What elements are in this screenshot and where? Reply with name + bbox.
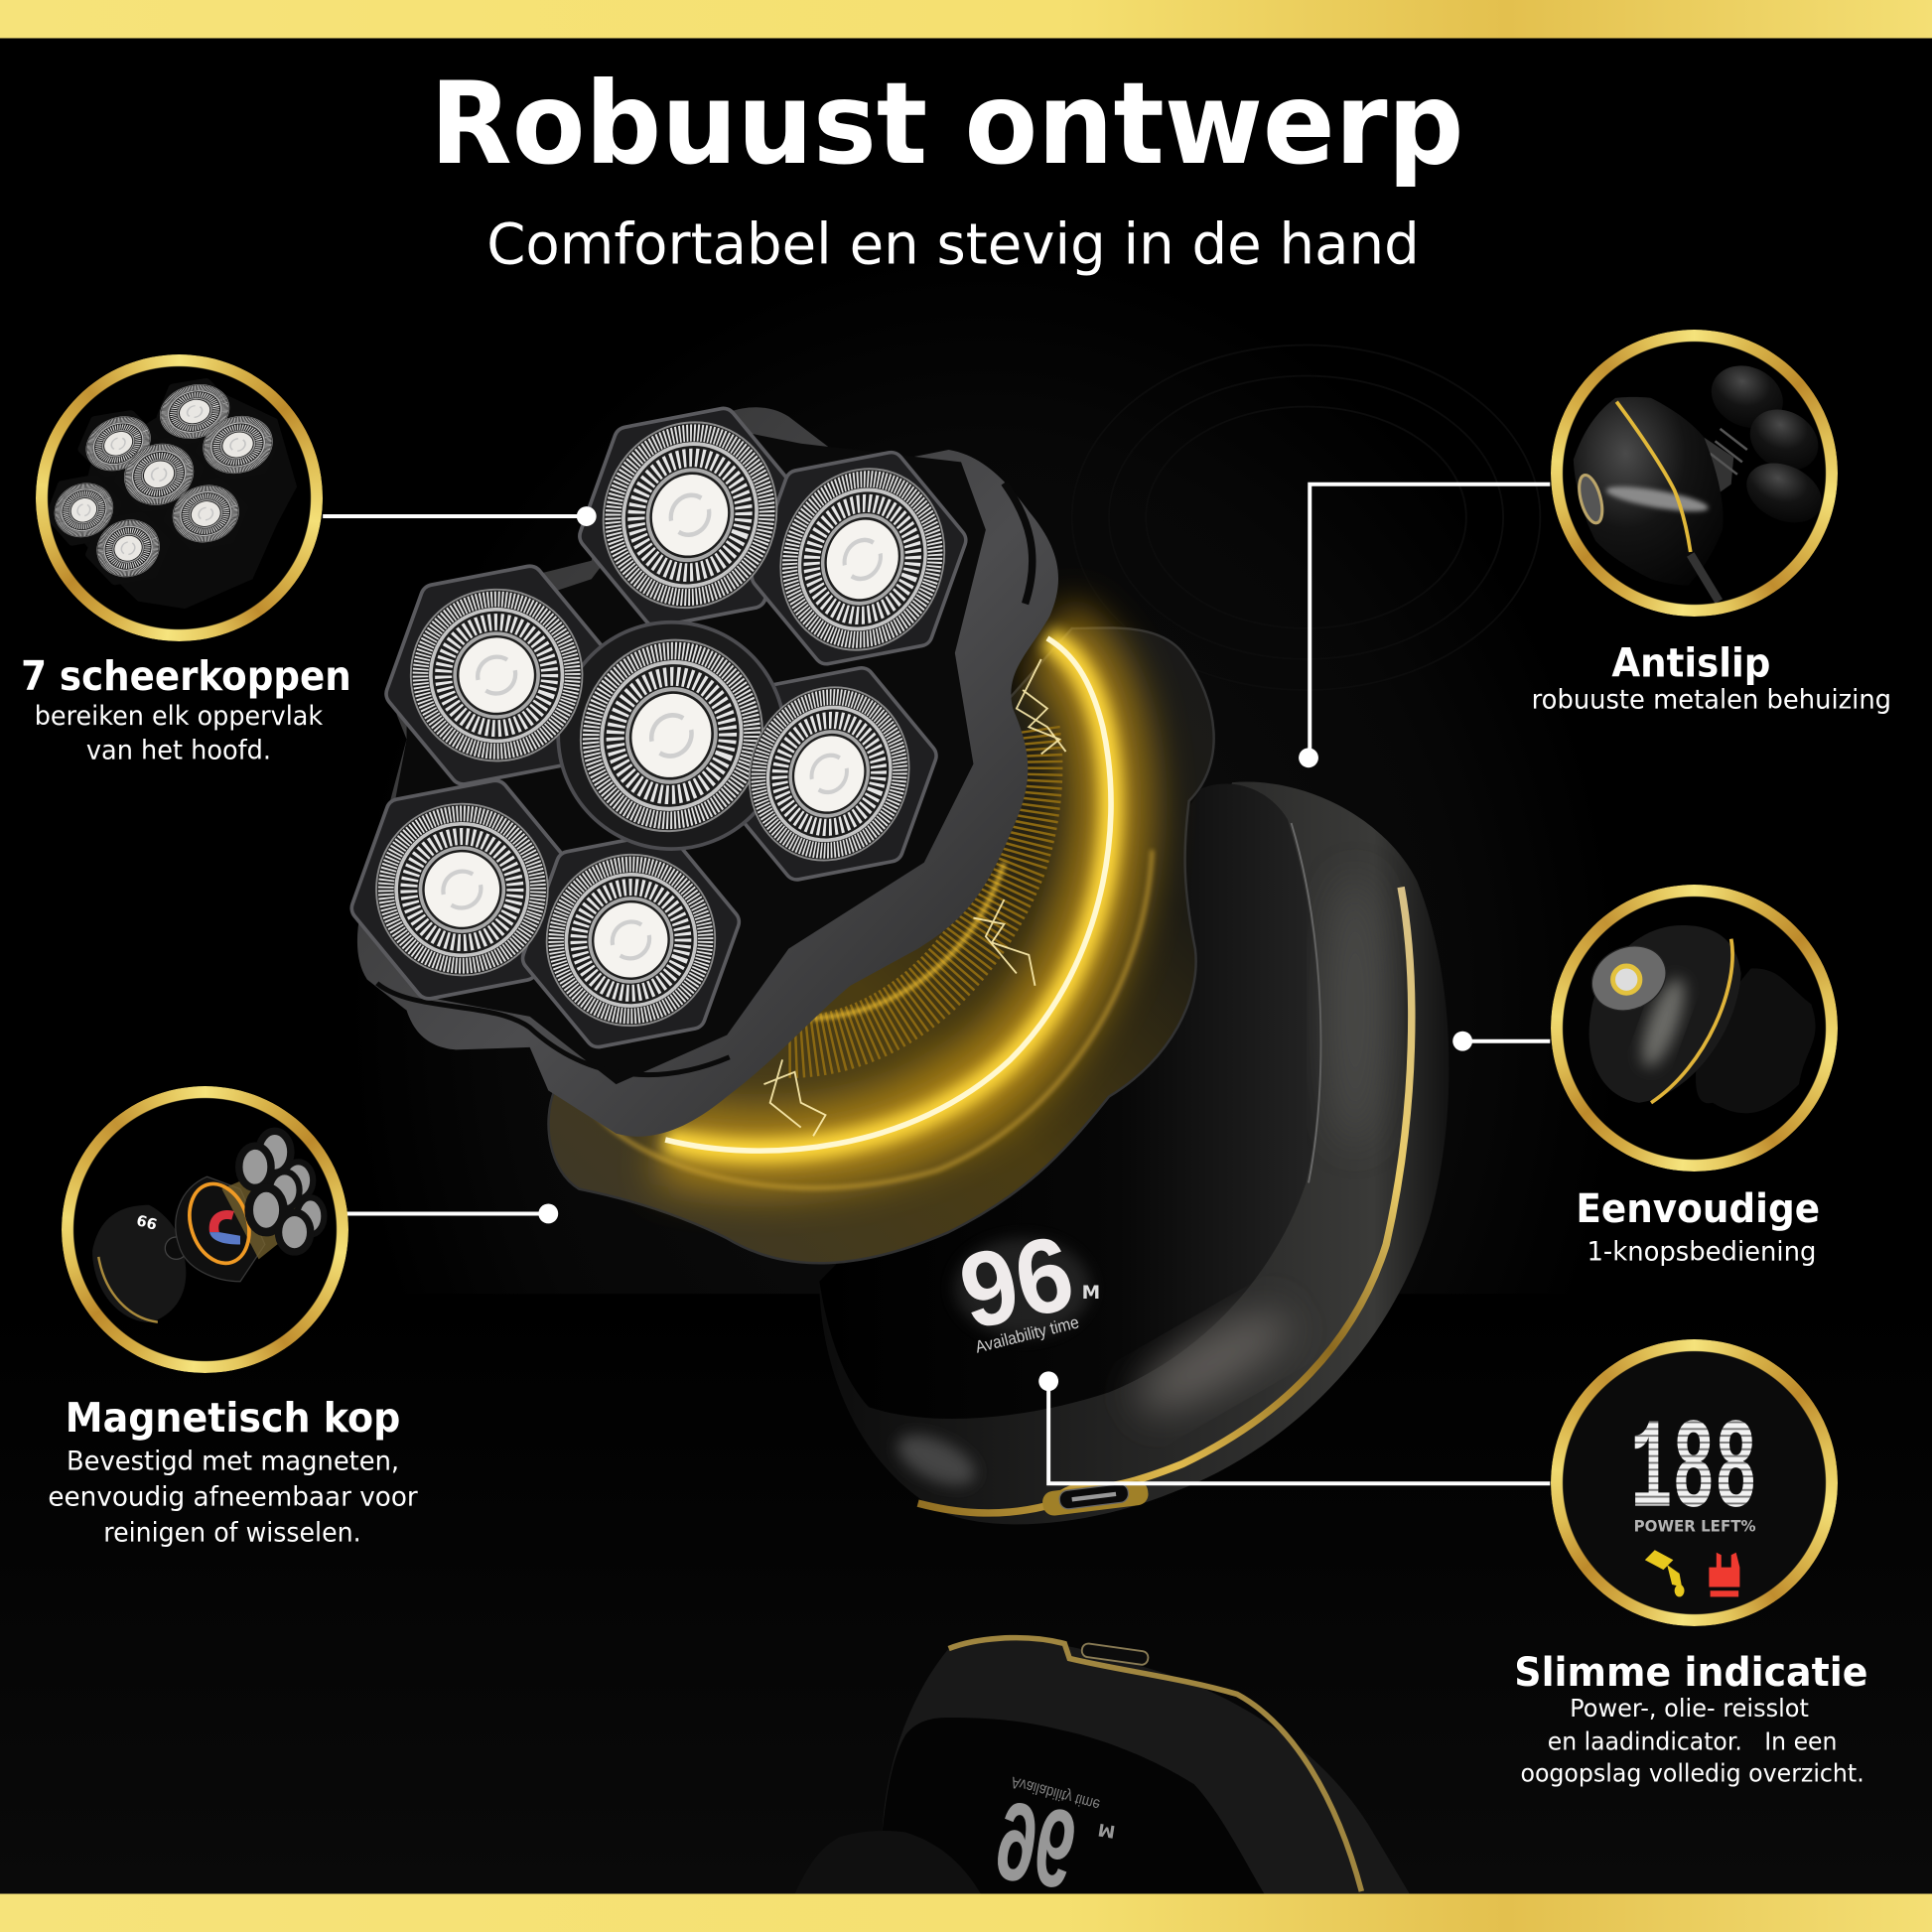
text: Magnetisch kop — [48, 1394, 418, 1549]
text: Magnetisch kop: Magnetisch kop — [66, 1394, 400, 1442]
text: 7 scheerkoppen: bereiken elk oppervlak — [35, 701, 324, 732]
digital display: 96 — [950, 1212, 1083, 1351]
icon: LED indicator panel — [1562, 1350, 1826, 1614]
leader lines — [323, 484, 1550, 1483]
digital display: M — [1082, 1283, 1100, 1304]
reflected display readout: Availability time — [1010, 1773, 1102, 1814]
gold ring: magnet — [62, 1086, 348, 1372]
text: Magnetisch kop: eenvoudig afneembaar voor — [48, 1482, 418, 1513]
text: Slimme indicatie: Power-, olie- reisslot — [1570, 1694, 1809, 1723]
top gold bar — [0, 0, 1932, 38]
digital display: Availability time — [973, 1311, 1081, 1357]
shaving head assembly — [352, 398, 1058, 1137]
icon: side view handle — [1574, 354, 1832, 602]
seven rotary blades — [578, 398, 802, 632]
handle highlights — [1126, 1295, 1302, 1428]
text: 7 scheerkoppen: van het hoofd. — [86, 735, 271, 765]
icon: LED indicator panel: POWER LEFT% — [1634, 1517, 1756, 1536]
text: Slimme indicatie: oogopslag volledig overzicht. — [1520, 1759, 1864, 1788]
USB-C port — [1041, 1479, 1150, 1517]
text: 7 scheerkoppen — [21, 652, 351, 765]
reflected display readout: 96 — [989, 1778, 1083, 1912]
text: Antislip — [1532, 640, 1891, 716]
shaver handle — [819, 781, 1449, 1524]
text: Magnetisch kop: Bevestigd met magneten, — [67, 1447, 399, 1477]
bottom gold bar — [0, 1894, 1932, 1932]
icon: power button view — [1582, 925, 1816, 1113]
reflected display readout: M — [1097, 1819, 1117, 1841]
text: Slimme indicatie: Slimme indicatie — [1514, 1650, 1867, 1696]
leader dots — [538, 506, 1472, 1391]
head body — [357, 407, 1058, 1137]
magnetic neck with glowing ring — [548, 627, 1214, 1263]
product reflection — [794, 1638, 1410, 1912]
icon: magnetic head exploded view: 66 — [134, 1211, 159, 1234]
text: Slimme indicatie — [1514, 1650, 1867, 1788]
text: Antislip: robuuste metalen behuizing — [1532, 685, 1891, 716]
text: Magnetisch kop: reinigen of wisselen. — [103, 1518, 361, 1549]
lightning arcs — [763, 659, 1066, 1136]
subtitle: Comfortabel en stevig in de hand — [486, 212, 1420, 278]
gold ring: antislip — [1551, 330, 1838, 616]
gold ring: heads — [36, 354, 322, 641]
text: Eenvoudige: 1-knopsbediening — [1587, 1237, 1816, 1268]
text: Slimme indicatie: en laadindicator. In een — [1548, 1726, 1837, 1755]
text: Antislip: Antislip — [1611, 640, 1770, 686]
text: 7 scheerkoppen: 7 scheerkoppen — [21, 652, 351, 700]
gold ring: button — [1551, 885, 1838, 1172]
text: Eenvoudige: Eenvoudige — [1576, 1186, 1820, 1232]
gold ring: indicators — [1551, 1338, 1837, 1626]
icon: LED indicator panel: 188 — [1630, 1400, 1757, 1545]
text: Eenvoudige — [1576, 1186, 1820, 1268]
gold trim — [918, 888, 1412, 1513]
icon: magnetic head exploded view — [92, 1131, 324, 1322]
icon: seven-head close-up — [46, 377, 297, 609]
title: Robuust ontwerp — [430, 58, 1463, 190]
head plates — [593, 421, 787, 614]
